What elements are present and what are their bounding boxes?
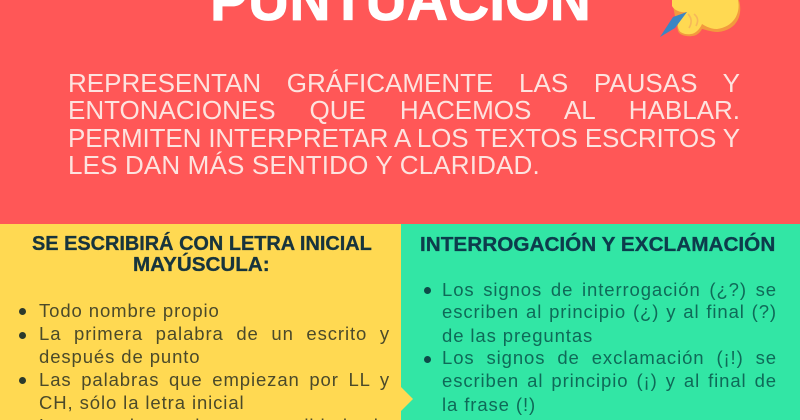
- intro paragraph: LES DAN MÁS SENTIDO Y CLARIDAD.: [68, 150, 540, 180]
- heading: mayúscula: MAYÚSCULA:: [133, 254, 270, 276]
- list: mayúscula: La primera palabra de un escrito y: [39, 323, 390, 344]
- list: interrogación: Los signos de interrogación (¿?) se: [442, 279, 777, 300]
- list: interrogación: de las preguntas: [442, 325, 593, 346]
- heading: mayúscula: SE ESCRIBIRÁ CON LETRA INICIAL: [32, 233, 372, 255]
- intro paragraph: ENTONACIONES QUE HACEMOS AL HABLAR.: [68, 95, 740, 125]
- list: mayúscula: después de punto: [39, 346, 200, 367]
- list: interrogación: la frase (!): [442, 394, 536, 415]
- panel: interrogación y exclamación: [401, 224, 800, 420]
- list: interrogación: escriben al principio (¡) y al final de: [442, 370, 777, 391]
- intro paragraph: PERMITEN INTERPRETAR A LOS TEXTOS ESCRITOS Y: [68, 123, 740, 153]
- arrow: yellow notch: [401, 387, 413, 411]
- list: mayúscula: Todo nombre propio: [39, 300, 220, 321]
- list: interrogación: [424, 279, 777, 415]
- heading: interrogación: INTERROGACIÓN Y EXCLAMACIÓN: [420, 234, 775, 256]
- icon: hand holding pen: [660, 0, 740, 37]
- panel: mayúscula: [0, 224, 401, 420]
- list: mayúscula: [19, 300, 390, 420]
- list: mayúscula: CH, sólo la letra inicial: [39, 392, 245, 413]
- list: interrogación: Los signos de exclamación (¡!) se: [442, 347, 777, 368]
- heading: mayúscula: [32, 232, 372, 276]
- intro paragraph: REPRESENTAN GRÁFICAMENTE LAS PAUSAS Y: [68, 68, 740, 98]
- intro paragraph: [68, 68, 740, 180]
- list: interrogación: escriben al principio (¿) y al final (?): [442, 301, 777, 322]
- list: mayúscula: Las palabras que empiezan por LL y: [39, 369, 390, 390]
